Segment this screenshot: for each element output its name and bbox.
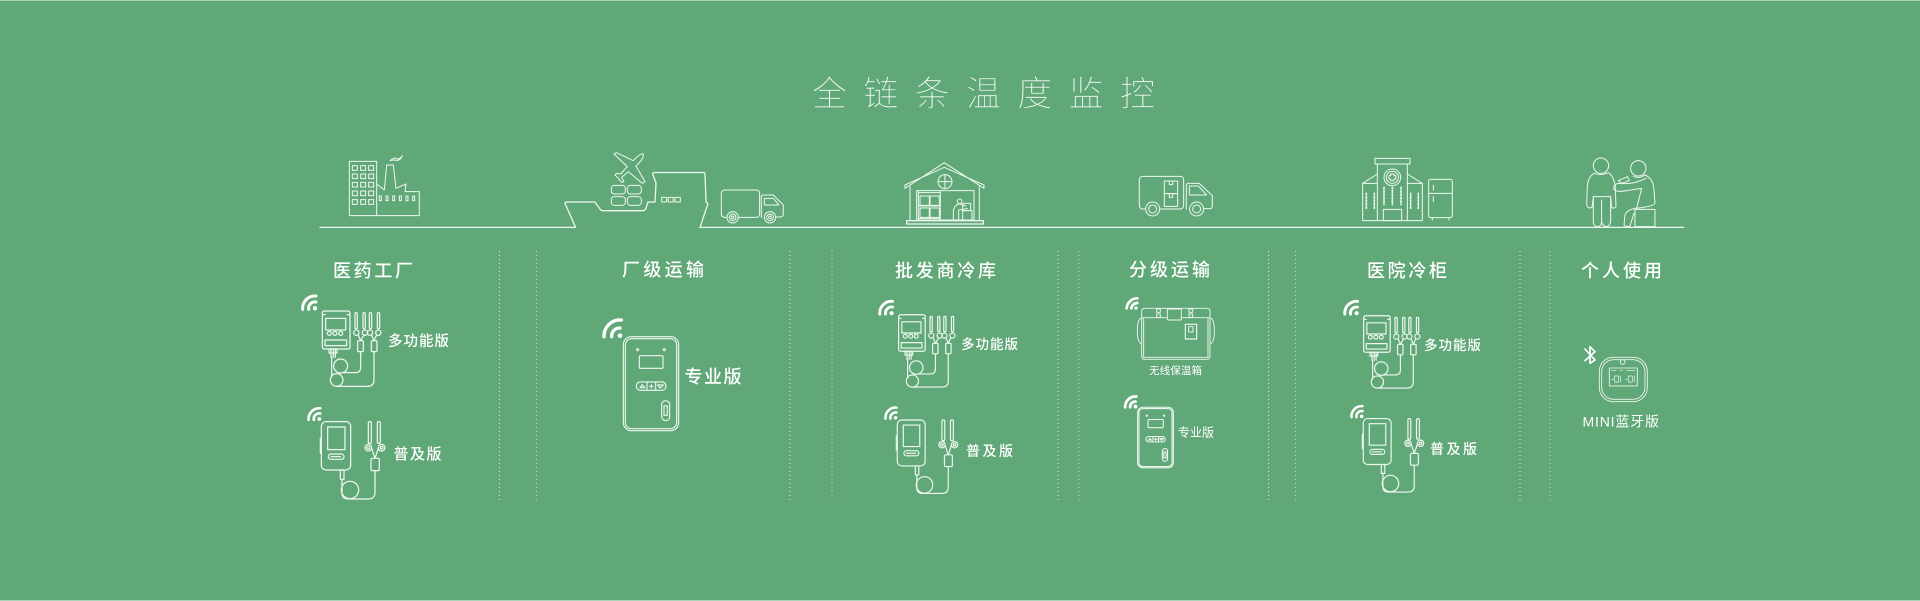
label: basic: 普及版	[394, 446, 442, 463]
device: multifunction, pharma factory	[303, 296, 381, 386]
column divider lines	[500, 251, 1550, 502]
heading: pharmaceutical factory: 医药工厂	[333, 261, 413, 281]
label: basic: 普及版	[1430, 441, 1477, 457]
device: wireless insulated box	[1127, 298, 1214, 359]
icon: airplane and cargo on ship	[611, 153, 680, 205]
label: multifunction: 多功能版	[388, 333, 450, 350]
device: multifunction, hospital	[1345, 301, 1420, 388]
heading: wholesaler cold storage: 批发商冷库	[895, 261, 996, 281]
heading: personal use: 个人使用	[1581, 261, 1662, 281]
heading: distribution transport: 分级运输	[1129, 260, 1210, 280]
device: basic, pharma factory	[309, 408, 385, 499]
heading: hospital cold cabinet: 医院冷柜	[1367, 261, 1447, 281]
icon: personal care figures	[1587, 158, 1655, 227]
icon: factory	[349, 156, 419, 216]
label: mini bluetooth: MINI蓝牙版	[1582, 414, 1659, 430]
top edge	[0, 0, 1920, 1]
label: multifunction: 多功能版	[1424, 337, 1482, 353]
device: multifunction, wholesaler	[880, 301, 955, 387]
device: mini bluetooth	[1585, 347, 1647, 402]
label: multifunction: 多功能版	[961, 336, 1018, 352]
timeline: ground line and ship	[320, 172, 1684, 227]
icon: delivery truck	[721, 190, 783, 223]
label: wireless insulated box: 无线保温箱	[1149, 364, 1202, 377]
label: professional: 专业版	[684, 367, 742, 387]
label: professional: 专业版	[1178, 424, 1214, 440]
label: basic: 普及版	[966, 443, 1013, 459]
icon: distribution truck	[1139, 176, 1212, 216]
device: basic, wholesaler	[885, 408, 958, 493]
heading: factory-level transport: 厂级运输	[622, 260, 704, 280]
device: professional, factory transport	[604, 320, 679, 431]
device: professional, distribution	[1125, 396, 1173, 468]
device: basic, hospital	[1351, 406, 1424, 492]
bottom edge	[0, 600, 1920, 601]
icon: hospital and refrigerator	[1363, 158, 1452, 221]
title: 全链条温度监控	[812, 75, 1155, 114]
icon: cold storage warehouse	[905, 163, 984, 224]
